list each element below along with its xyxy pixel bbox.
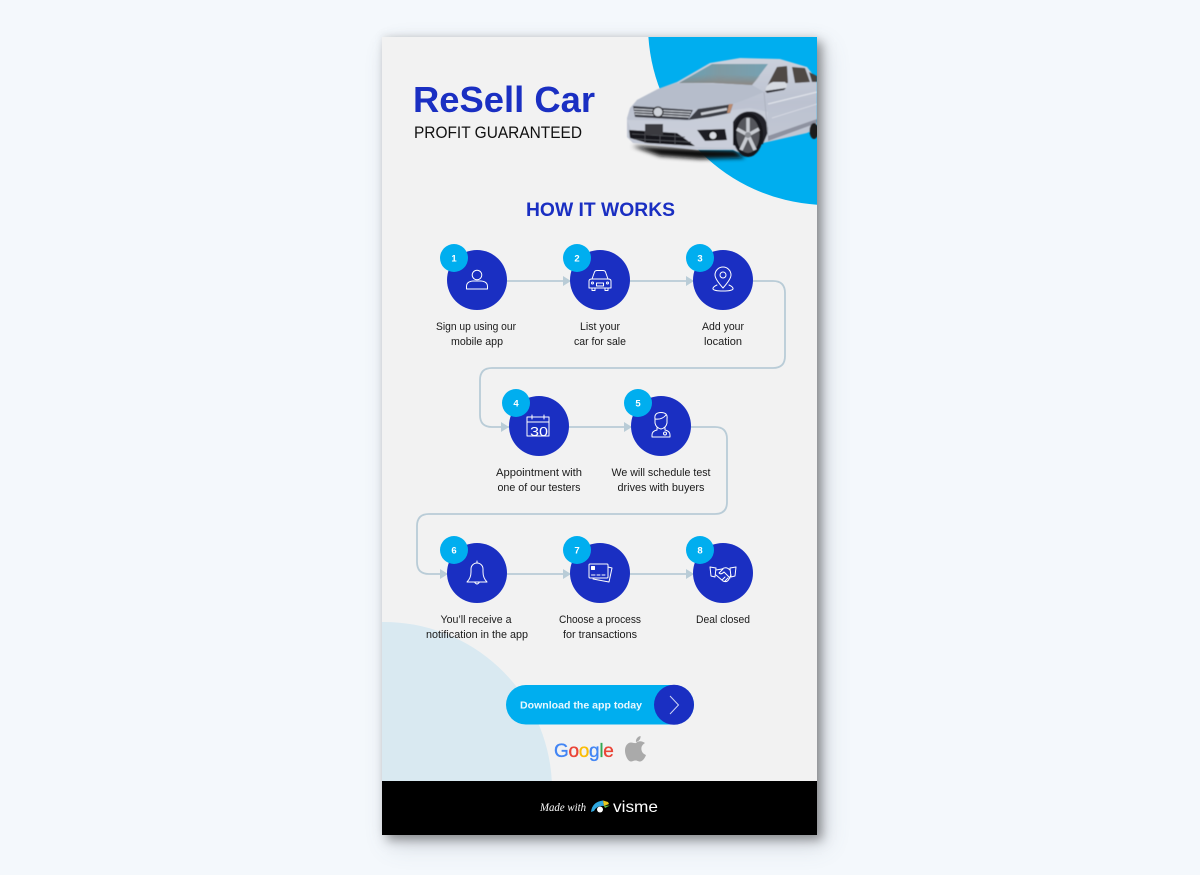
apple logo bbox=[625, 736, 646, 762]
step 8: 8 bbox=[697, 546, 703, 556]
step 3: Add your bbox=[702, 321, 744, 333]
icon: chevron bbox=[670, 696, 678, 714]
step 3 bbox=[686, 244, 753, 348]
title: ReSell Car bbox=[413, 79, 595, 120]
heading: how it works: HOW IT WORKS bbox=[526, 200, 675, 221]
icon: location pin bbox=[713, 267, 733, 291]
google logo: Google bbox=[554, 741, 614, 762]
step 2: 2 bbox=[574, 254, 580, 264]
footer bar bbox=[382, 781, 817, 835]
visme logo mark bbox=[591, 800, 610, 812]
visme wordmark: visme bbox=[613, 799, 658, 816]
step 2: car for sale bbox=[574, 336, 626, 348]
step 4: 4 bbox=[513, 398, 519, 410]
icon: tester person bbox=[652, 412, 670, 437]
step 7 bbox=[559, 536, 641, 641]
download button bbox=[506, 685, 694, 725]
download button: Download the app today bbox=[520, 700, 642, 712]
made with text: Made with bbox=[539, 802, 586, 814]
step 6: You’ll receive a bbox=[440, 614, 512, 626]
step 1: 1 bbox=[451, 254, 457, 264]
flow connector with arrows bbox=[417, 276, 785, 579]
step 5 bbox=[612, 389, 710, 494]
step 5: 5 bbox=[635, 398, 641, 410]
step 1: Sign up using our bbox=[436, 321, 516, 333]
icon: user bbox=[466, 270, 488, 289]
decorative blue circle behind the car bbox=[648, 37, 817, 205]
step 7: 7 bbox=[574, 546, 580, 556]
step 6: 6 bbox=[451, 546, 457, 556]
car photo illustration bbox=[627, 58, 818, 159]
step 1: mobile app bbox=[451, 336, 503, 348]
icon: handshake bbox=[710, 567, 736, 582]
step 3: location bbox=[704, 336, 742, 348]
panel: infographic background bbox=[382, 37, 817, 835]
step 4: one of our testers bbox=[498, 482, 581, 494]
step 1 bbox=[436, 244, 516, 348]
subtitle: PROFIT GUARANTEED bbox=[414, 124, 582, 142]
step 2: List your bbox=[580, 321, 620, 333]
step 2 bbox=[563, 244, 630, 348]
light blue circle bottom left bbox=[382, 622, 552, 781]
step 4: Appointment with bbox=[496, 467, 582, 479]
step 4 bbox=[496, 389, 582, 494]
icon: bell bbox=[467, 561, 487, 584]
step 5: We will schedule test bbox=[612, 467, 710, 479]
step 5: drives with buyers bbox=[618, 482, 705, 494]
icon: bank cards bbox=[589, 564, 612, 582]
icon: car front bbox=[589, 270, 611, 290]
step 4: 30 bbox=[530, 424, 548, 439]
step 7: for transactions bbox=[563, 629, 637, 641]
step 3: 3 bbox=[697, 254, 703, 264]
step 8: Deal closed bbox=[696, 614, 750, 626]
icon: calendar bbox=[527, 415, 549, 436]
step 8 bbox=[686, 536, 753, 626]
step 7: Choose a process bbox=[559, 614, 641, 626]
step 6: notification in the app bbox=[426, 629, 528, 641]
step 6 bbox=[426, 536, 528, 641]
